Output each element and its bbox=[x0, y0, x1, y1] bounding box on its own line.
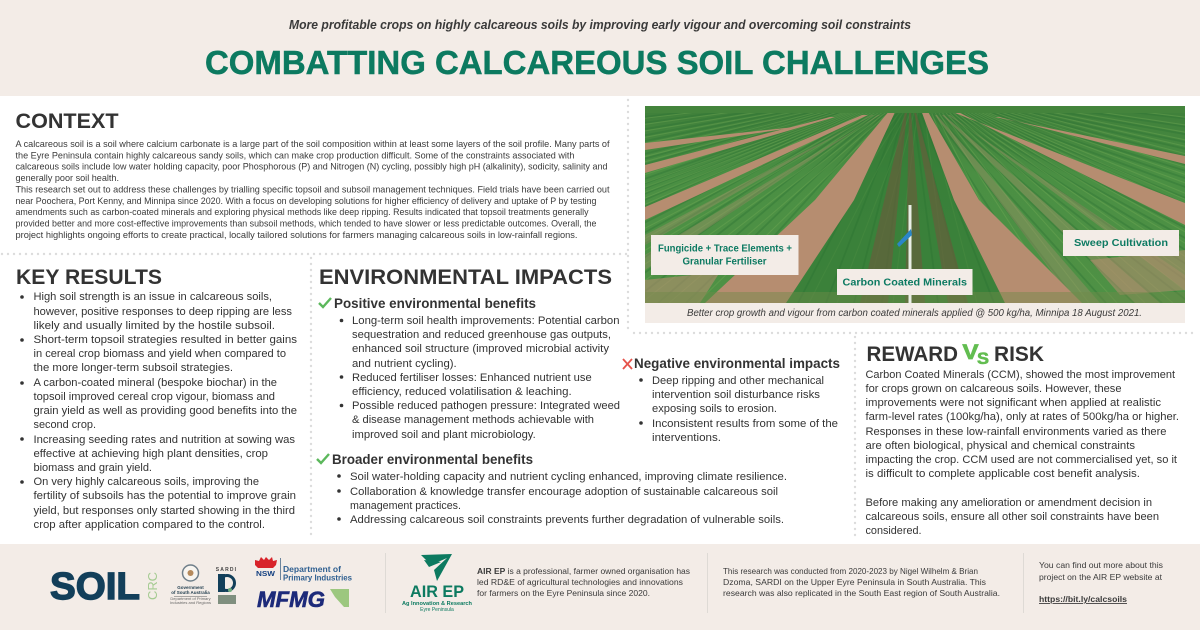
context body text: project highlights ongoing efforts to create practical, locally tailored solutions for farmers managing calcareous soils in low-rainfall regions. bbox=[16, 230, 577, 240]
key results bullets: the more longer-term subsoil strategies. bbox=[34, 362, 233, 374]
text: about AIR EP: AIR EP is a professional, farmer owned organisation has bbox=[477, 566, 690, 576]
caption bar bbox=[645, 303, 1185, 323]
text: research note: research was also replicated in the South East region of South Australia. bbox=[723, 588, 1000, 598]
key results bullets: yield, but responses only started showing in the third bbox=[34, 505, 295, 517]
text: about AIR EP bbox=[477, 566, 690, 598]
panel: reward vs risk bbox=[866, 341, 1179, 537]
text: research note: Dzoma, SARDI on the Upper Eyre Peninsula in South Australia. This bbox=[723, 577, 986, 587]
text: more information link: https://bit.ly/calcsoils bbox=[1039, 594, 1127, 604]
text: more information link: project on the AIR EP website at bbox=[1039, 572, 1163, 582]
heading: reward vs risk bbox=[866, 341, 1044, 368]
key results bullets: High soil strength is an issue in calcareous soils, bbox=[34, 291, 272, 303]
context body text: A calcareous soil is a soil where calcium carbonate is a large part of the soil composition within at least some layers of the soil profile. Many parts of bbox=[16, 139, 610, 149]
context body text: provided better and more cost-effective improvements than subsoil methods, which tended to have slower or less predictable outcomes. Overall, the bbox=[16, 219, 596, 229]
logo: SARDI: SARDI bbox=[216, 567, 237, 573]
heading: reward vs risk: V bbox=[962, 341, 978, 364]
panel: context bbox=[16, 110, 610, 240]
key results bullets: On very highly calcareous soils, improving the bbox=[34, 476, 259, 488]
logo: AIR EP: Ag Innovation & Research bbox=[402, 601, 473, 607]
negative impacts bullets: intervention soil disturbance risks bbox=[652, 389, 820, 401]
heading: key results: KEY RESULTS bbox=[16, 266, 162, 289]
key results bullets: biomass and grain yield. bbox=[34, 462, 152, 474]
negative impacts bullets: interventions. bbox=[652, 432, 721, 444]
reward vs risk body text: considered. bbox=[866, 525, 922, 537]
panel: environmental impacts bbox=[317, 266, 840, 526]
context body text: amendments such as carbon-coated minerals and exploring physical methods like deep ripping. Results indicated that topsoil treatments generally bbox=[16, 207, 589, 217]
key results bullets bbox=[20, 291, 297, 531]
text: research note bbox=[723, 566, 1000, 598]
title: COMBATTING CALCAREOUS SOIL CHALLENGES bbox=[205, 45, 989, 82]
positive benefits bullets: sequestration and reduced greenhouse gas outputs, bbox=[352, 329, 611, 341]
context body text bbox=[16, 139, 610, 240]
logo: Government of South Australia: Industries and Regions bbox=[170, 600, 211, 605]
icon: red cross bbox=[623, 359, 632, 369]
footer bbox=[0, 544, 1200, 630]
reward vs risk body text: for crops grown on calcareous soils. However, these bbox=[866, 383, 1122, 395]
subheading: negative impacts: Negative environmental impacts bbox=[634, 356, 840, 371]
positive benefits bullets: Long-term soil health improvements: Potential carbon bbox=[352, 315, 620, 327]
key results bullets: grain yield as well as providing good benefits into the bbox=[34, 405, 297, 417]
logo: Government of South Australia bbox=[170, 565, 211, 605]
panel: field photo bbox=[645, 106, 1185, 323]
heading: context: CONTEXT bbox=[16, 110, 119, 133]
logo: Soil CRC: SOIL bbox=[50, 566, 140, 608]
key results bullets: A carbon-coated mineral (bespoke biochar) in the bbox=[34, 377, 277, 389]
heading: reward vs risk: RISK bbox=[994, 343, 1044, 366]
negative impacts bullets: Inconsistent results from some of the bbox=[652, 418, 838, 430]
caption bar: Better crop growth and vigour from carbon coated minerals applied @ 500 kg/ha, Minnipa 18 August 2021. bbox=[687, 308, 1142, 319]
logo: AIR EP bbox=[402, 554, 473, 613]
logo: NSW Department of Primary Industries: Primary Industries bbox=[283, 572, 352, 582]
positive benefits bullets: & disease management methods achievable with bbox=[352, 414, 594, 426]
icon: green tick positive bbox=[319, 298, 331, 307]
logo: Soil CRC: CRC bbox=[145, 572, 160, 600]
logo: NSW Department of Primary Industries bbox=[255, 557, 352, 582]
broader benefits bullets: Soil water-holding capacity and nutrient cycling enhanced, improving climate resilience. bbox=[350, 471, 787, 483]
label: sweep cultivation bbox=[1063, 230, 1179, 256]
reward vs risk body text bbox=[866, 369, 1179, 537]
heading: reward vs risk: REWARD bbox=[866, 343, 958, 366]
text: about AIR EP: for farmers on the Eyre Peninsula since 2020. bbox=[477, 588, 650, 598]
icon: green tick broader bbox=[317, 454, 329, 463]
heading: reward vs risk: S bbox=[977, 349, 989, 368]
text: more information link bbox=[1039, 560, 1163, 604]
label: fungicide: Granular Fertiliser bbox=[682, 256, 767, 268]
header banner bbox=[0, 0, 1200, 96]
header tagline: More profitable crops on highly calcareous soils by improving early vigour and overcoming soil constraints bbox=[289, 17, 911, 32]
context body text: the Eyre Peninsula contain highly calcareous sandy soils, which can make crop production difficult. Some of the constraints associated with bbox=[16, 150, 574, 160]
key results bullets: second crop. bbox=[34, 419, 96, 431]
context body text: near Poochera, Port Kenny, and Minnipa since 2020. With a focus on developing solutions for higher efficiency of delivery and uptake of P by testing bbox=[16, 196, 596, 206]
key results bullets: topsoil improved cereal crop vigour, biomass and bbox=[34, 391, 275, 403]
label: fungicide bbox=[651, 235, 798, 275]
reward vs risk body text: is difficult to complete applicable cost benefit analysis. bbox=[866, 468, 1140, 480]
reward vs risk body text: Carbon Coated Minerals (CCM), showed the most improvement bbox=[866, 369, 1176, 381]
reward vs risk body text: impacting the crop. CCM used are not commercialised yet, so it bbox=[866, 454, 1178, 466]
key results bullets: Increasing seeding rates and nutrition at sowing was bbox=[34, 434, 295, 446]
broader benefits bullets bbox=[337, 471, 787, 526]
text: research note: This research was conducted from 2020-2023 by Nigel Wilhelm & Brian bbox=[723, 566, 978, 576]
logo: AIR EP: Eyre Peninsula bbox=[420, 607, 454, 613]
text: more information link: You can find out more about this bbox=[1039, 560, 1163, 570]
logo: NSW Department of Primary Industries: NSW bbox=[256, 569, 276, 578]
negative impacts bullets bbox=[639, 375, 838, 444]
context body text: calcareous soils include low water holding capacity, poor Phosphorous (P) and Nitrogen (N) cycling, possibly high pH (alkalinity), sodicity, salinity and bbox=[16, 162, 608, 172]
photo: marker post bbox=[897, 205, 912, 303]
key results bullets: crop after application compared to the control. bbox=[34, 519, 265, 531]
panel: key results bbox=[16, 266, 297, 531]
logo: Government of South Australia: Government bbox=[177, 585, 204, 590]
reward vs risk body text: calcareous soils, ensure all other soil constraints have been bbox=[866, 511, 1159, 523]
reward vs risk body text: Responses in these low-rainfall environments varied as there bbox=[866, 426, 1166, 438]
positive benefits bullets: efficiency, reduced volatilisation & leaching. bbox=[352, 386, 572, 398]
logo: Government of South Australia: of South Australia bbox=[171, 590, 210, 595]
reward vs risk body text: improvements were not significant when applied at realistic bbox=[866, 397, 1161, 409]
label: sweep cultivation: Sweep Cultivation bbox=[1074, 237, 1168, 249]
label: fungicide: Fungicide + Trace Elements + bbox=[658, 244, 792, 254]
key results bullets: fertility of subsoils has the potential to improve grain bbox=[34, 490, 296, 502]
positive benefits bullets bbox=[340, 315, 620, 441]
positive benefits bullets: improved soil and plant microbiology. bbox=[352, 429, 536, 441]
label: carbon coated minerals bbox=[837, 269, 972, 295]
label: carbon coated minerals: Carbon Coated Minerals bbox=[842, 276, 967, 288]
positive benefits bullets: Reduced fertiliser losses: Enhanced nutrient use bbox=[352, 372, 592, 384]
positive benefits bullets: enhanced soil structure (improved microbial activity bbox=[352, 343, 609, 355]
logo: SARDI bbox=[216, 567, 237, 604]
text: about AIR EP: led RD&E of agricultural technologies and innovations bbox=[477, 577, 683, 587]
reward vs risk body text: farm-level rates (100kg/ha), only at rates of 500kg/ha or higher. bbox=[866, 411, 1179, 423]
logo: NSW Department of Primary Industries: Department of bbox=[283, 564, 341, 574]
key results bullets: Short-term topsoil strategies resulted in better gains bbox=[34, 334, 297, 346]
context body text: This research set out to address these challenges by trialling specific topsoil and subsoil management techniques. Field trials have been carried out bbox=[16, 184, 610, 194]
positive benefits bullets: Possible reduced pathogen pressure: Integrated weed bbox=[352, 400, 620, 412]
positive benefits bullets: and nutrient cycling). bbox=[352, 358, 457, 370]
broader benefits bullets: Addressing calcareous soil constraints prevents further degradation of vulnerable soils. bbox=[350, 514, 784, 526]
key results bullets: effective at achieving high plant densities, crop bbox=[34, 448, 268, 460]
broader benefits bullets: management practices. bbox=[350, 500, 461, 512]
reward vs risk body text: Before making any amelioration or amendment decision in bbox=[866, 497, 1152, 509]
reward vs risk body text: are often biological, physical and chemical constraints bbox=[866, 440, 1135, 452]
subheading: broader benefits: Broader environmental benefits bbox=[332, 452, 533, 467]
key results bullets: likely and usually limited by the hostile subsoil. bbox=[34, 320, 275, 332]
logo: Government of South Australia: Department of Primary bbox=[170, 596, 211, 601]
heading: environmental impacts: ENVIRONMENTAL IMPACTS bbox=[319, 266, 612, 289]
negative impacts bullets: Deep ripping and other mechanical bbox=[652, 375, 824, 387]
logo: MFMG: MFMG bbox=[257, 587, 325, 612]
broader benefits bullets: Collaboration & knowledge transfer encourage adoption of sustainable calcareous soil bbox=[350, 486, 778, 498]
subheading: positive benefits: Positive environmental benefits bbox=[334, 296, 536, 311]
photo: crop rows bbox=[645, 106, 1185, 303]
negative impacts bullets: exposing soils to erosion. bbox=[652, 403, 777, 415]
key results bullets: however, positive responses to deep ripping are less bbox=[34, 306, 292, 318]
key results bullets: in cereal crop biomass and yield when compared to bbox=[34, 348, 286, 360]
context body text: generally poor soil health. bbox=[16, 173, 119, 183]
logo: AIR EP: AIR EP bbox=[410, 582, 464, 601]
